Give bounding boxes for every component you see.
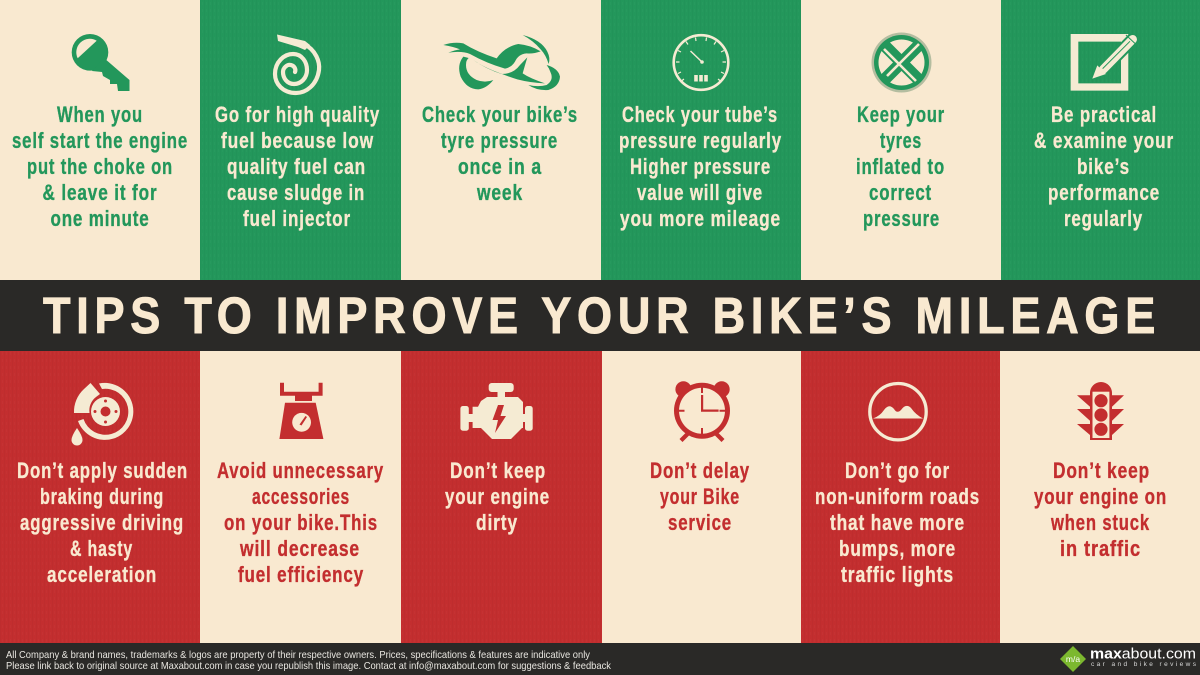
icon: pressure gauge	[674, 35, 728, 90]
disclaimer text	[6, 649, 612, 672]
text: tube pressure tip: value will give	[637, 180, 763, 205]
text: fuel quality tip: Go for high quality	[215, 102, 380, 127]
text: examine performance tip: regularly	[1064, 206, 1143, 231]
text: sudden braking tip: braking during	[40, 484, 164, 509]
text: engine off in traffic tip: in traffic	[1060, 536, 1141, 561]
text: dirty engine tip: dirty	[476, 510, 518, 535]
text: choke tip: When you	[57, 102, 143, 127]
panel: sudden braking tip	[0, 351, 200, 643]
panel: non-uniform roads tip	[801, 351, 1000, 643]
footer bar	[0, 643, 1200, 675]
text: examine performance tip: performance	[1048, 180, 1160, 205]
text: sudden braking tip: Don’t apply sudden	[17, 458, 188, 483]
icon: weighing scale	[279, 383, 323, 439]
icon: tyre wheel	[872, 32, 932, 92]
text: tyre pressure weekly tip	[422, 102, 578, 205]
text: accessories tip: fuel efficiency	[238, 562, 364, 587]
logo: maxabout: m/a	[1066, 654, 1080, 664]
icon: alarm clock	[674, 381, 730, 442]
title banner	[0, 280, 1200, 351]
panel: choke tip	[0, 0, 200, 280]
text: choke tip: & leave it for	[42, 180, 158, 205]
panel: engine off in traffic tip	[1000, 351, 1200, 643]
text: tube pressure tip: pressure regularly	[619, 128, 782, 153]
text: choke tip: one minute	[50, 206, 150, 231]
text: fuel quality tip: fuel injector	[243, 206, 351, 231]
text: accessories tip: accessories	[252, 484, 350, 509]
text: choke tip: self start the engine	[12, 128, 188, 153]
text: examine performance tip: Be practical	[1051, 102, 1157, 127]
text: sudden braking tip: aggressive driving	[20, 510, 184, 535]
panel: accessories tip	[200, 351, 401, 643]
text: choke tip	[12, 102, 188, 231]
text: tube pressure tip: Check your tube’s	[622, 102, 778, 127]
icon: traffic light	[1077, 382, 1124, 440]
text: non-uniform roads tip: Don’t go for	[845, 458, 950, 483]
text: accessories tip: Avoid unnecessary	[217, 458, 384, 483]
text: accessories tip: will decrease	[239, 536, 360, 561]
text: choke tip: put the choke on	[27, 154, 173, 179]
text: inflate tyres tip: pressure	[863, 206, 940, 231]
text: bike service tip: Don’t delay	[650, 458, 750, 483]
text: non-uniform roads tip	[815, 458, 980, 587]
text: sudden braking tip	[17, 458, 188, 587]
text: tube pressure tip: you more mileage	[620, 206, 781, 231]
text: accessories tip	[217, 458, 384, 587]
text: inflate tyres tip: Keep your	[857, 102, 945, 127]
text: engine off in traffic tip: when stuck	[1050, 510, 1150, 535]
text: engine off in traffic tip	[1034, 458, 1167, 561]
text: non-uniform roads tip: traffic lights	[841, 562, 954, 587]
text: engine off in traffic tip: Don’t keep	[1053, 458, 1150, 483]
icon: note and pencil	[1071, 34, 1137, 91]
text: sudden braking tip: & hasty	[70, 536, 133, 561]
panel: tube pressure tip	[601, 0, 801, 280]
icon: fuel hose spiral	[275, 34, 319, 93]
text: fuel quality tip: quality fuel can	[227, 154, 366, 179]
text: sudden braking tip: acceleration	[47, 562, 157, 587]
logo: maxabout: car and bike reviews	[1091, 661, 1197, 668]
panel: inflate tyres tip	[801, 0, 1001, 280]
icon: motorbike	[443, 35, 560, 90]
text: tube pressure tip: Higher pressure	[630, 154, 771, 179]
text: tyre pressure weekly tip: once in a	[458, 154, 542, 179]
text: fuel quality tip	[215, 102, 380, 231]
panel: tyre pressure weekly tip	[401, 0, 601, 280]
text: examine performance tip	[1034, 102, 1174, 231]
icon: brake disc with drop	[72, 383, 133, 446]
text: bike service tip	[650, 458, 750, 535]
text: tyre pressure weekly tip: week	[476, 180, 523, 205]
logo: maxabout	[1060, 646, 1197, 672]
text: examine performance tip: bike’s	[1077, 154, 1130, 179]
panel: bike service tip	[602, 351, 801, 643]
text: bike service tip: service	[668, 510, 732, 535]
text: inflate tyres tip	[856, 102, 945, 231]
icon: key	[72, 34, 130, 91]
text: bike service tip: your Bike	[660, 484, 740, 509]
text: inflate tyres tip: tyres	[880, 128, 922, 153]
text: dirty engine tip: your engine	[445, 484, 550, 509]
text: non-uniform roads tip: bumps, more	[839, 536, 956, 561]
text: non-uniform roads tip: that have more	[830, 510, 965, 535]
disclaimer text: Please link back to original source at Maxabout.com in case you republish this image. Contact at info@maxabout.com for suggestions & feedback	[6, 660, 612, 672]
text: tyre pressure weekly tip: tyre pressure	[441, 128, 558, 153]
disclaimer text: All Company & brand names, trademarks & logos are property of their respective owners. Prices, specifications & features are indicative only	[6, 649, 591, 661]
text: dirty engine tip	[445, 458, 550, 535]
icon: engine	[460, 383, 533, 439]
text: inflate tyres tip: inflated to	[856, 154, 945, 179]
panel: dirty engine tip	[401, 351, 602, 643]
text: fuel quality tip: fuel because low	[221, 128, 374, 153]
text: inflate tyres tip: correct	[869, 180, 932, 205]
logo: maxabout: maxabout.com	[1090, 646, 1196, 662]
text: tube pressure tip	[619, 102, 782, 231]
text: fuel quality tip: cause sludge in	[227, 180, 365, 205]
text: dirty engine tip: Don’t keep	[450, 458, 546, 483]
panel: fuel quality tip	[200, 0, 401, 280]
text: accessories tip: on your bike.This	[224, 510, 378, 535]
text: tyre pressure weekly tip: Check your bike’s	[422, 102, 578, 127]
text: non-uniform roads tip: non-uniform roads	[815, 484, 980, 509]
panel: examine performance tip	[1001, 0, 1200, 280]
icon: road bumps	[870, 384, 926, 440]
